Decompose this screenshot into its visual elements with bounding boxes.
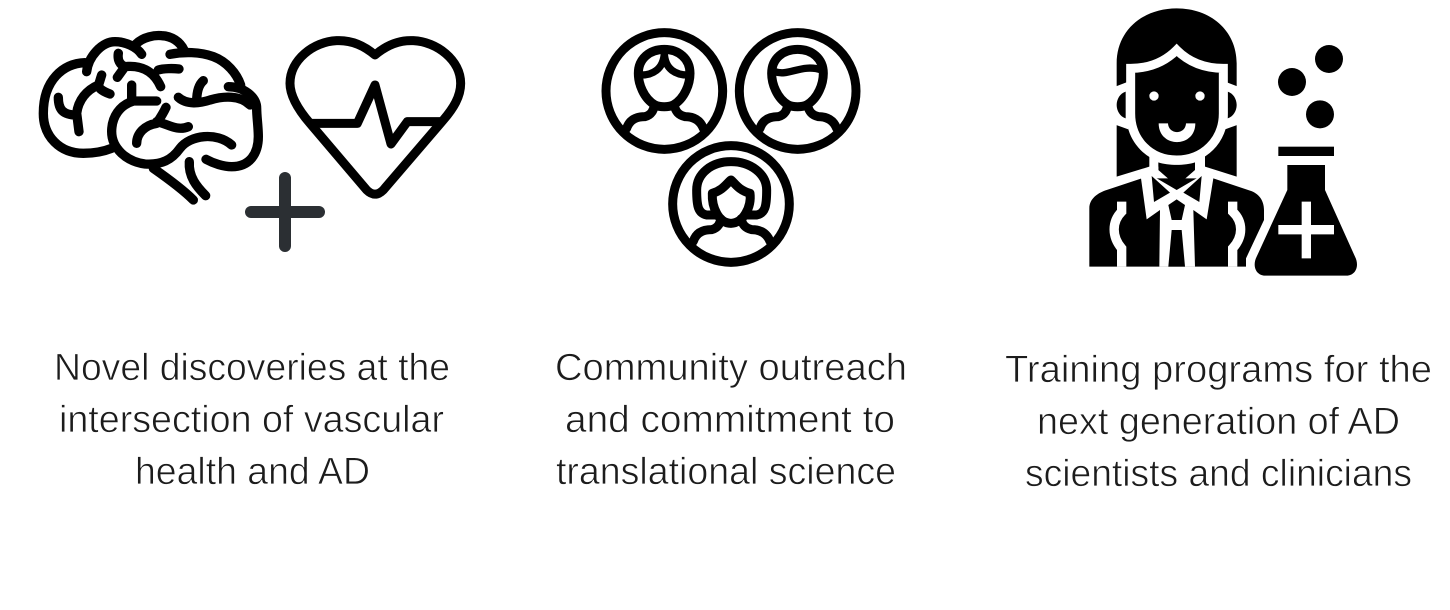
text: vascular health caption: health and AD [135, 451, 370, 493]
text: training programs caption: next generation of AD [1037, 401, 1400, 443]
text: training programs caption: scientists and clinicians [1025, 453, 1412, 495]
person two [739, 33, 856, 149]
person one [606, 33, 723, 149]
icon: three people in circles [606, 33, 856, 262]
text: vascular health caption [54, 347, 450, 493]
text: community outreach caption: and commitment to [565, 399, 895, 441]
text: training programs caption: Training programs for the [1005, 349, 1432, 391]
jacket [1089, 178, 1264, 267]
icon: plus sign [245, 172, 325, 252]
text: community outreach caption [555, 347, 907, 493]
icon: flask with bubbles [1255, 45, 1357, 276]
panel: vascular health and AD [43, 36, 461, 493]
text: training programs caption [1005, 349, 1432, 495]
neck [1158, 162, 1195, 186]
collar [1141, 174, 1213, 267]
icon: brain [43, 36, 258, 200]
icon: scientist [1089, 8, 1264, 267]
text: community outreach caption: translational science [556, 451, 896, 493]
text: vascular health caption: intersection of vascular [59, 399, 444, 441]
ears [1117, 92, 1237, 118]
panel: community outreach [555, 33, 907, 493]
text: vascular health caption: Novel discoveries at the [54, 347, 450, 389]
hair [1117, 8, 1237, 177]
text: community outreach caption: Community outreach [555, 347, 907, 389]
panel: training programs [1005, 8, 1432, 495]
tie [1168, 199, 1185, 267]
face [1131, 50, 1223, 160]
person three [673, 146, 789, 262]
icon: heart with pulse line [290, 41, 461, 194]
